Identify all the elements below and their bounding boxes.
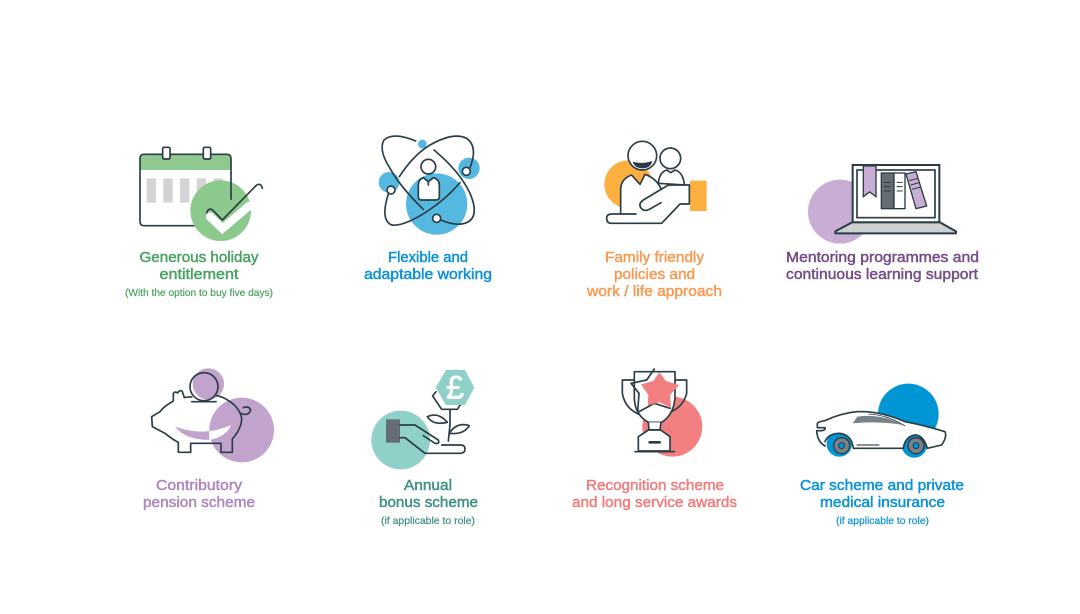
panel: recognition xyxy=(572,369,737,511)
heading line two: medical: medical insurance xyxy=(820,495,945,511)
panel: family friendly xyxy=(586,141,722,300)
heading line two: mentoring: continuous learning support xyxy=(786,267,978,283)
icon: laptop with books xyxy=(808,165,956,244)
heading line two: family: policies and xyxy=(614,267,695,283)
heading: car: Car scheme and private xyxy=(800,478,964,494)
panel: car scheme xyxy=(800,384,964,527)
heading: pension: Contributory xyxy=(156,478,243,494)
heading line two: holiday: entitlement xyxy=(160,267,238,283)
panel: holiday xyxy=(125,147,273,299)
icon: family in hand xyxy=(604,141,707,223)
heading: family: Family friendly xyxy=(605,250,705,266)
panel: bonus xyxy=(371,369,478,527)
icon: hand with plant and pound: £ xyxy=(446,369,464,405)
note: buy five days: (With the option to buy five days) xyxy=(125,287,273,299)
heading line two: flexible: adaptable working xyxy=(364,267,492,283)
panel: flexible working xyxy=(364,136,492,283)
heading line two: bonus: bonus scheme xyxy=(379,495,478,511)
heading: mentoring: Mentoring programmes and xyxy=(786,250,979,266)
icon: hand with plant and pound xyxy=(371,369,474,469)
heading line two: awards: and long service awards xyxy=(572,495,737,511)
note: if applicable: (if applicable to role) xyxy=(836,515,929,527)
heading: holiday: Generous holiday xyxy=(140,250,259,266)
panel: pension xyxy=(143,368,274,511)
heading: recognition: Recognition scheme xyxy=(586,478,724,494)
icon: calendar with check xyxy=(140,147,262,241)
heading: annual: Annual xyxy=(404,478,452,494)
panel: mentoring xyxy=(786,165,979,283)
note: if applicable: (if applicable to role) xyxy=(381,515,475,527)
icon: piggy bank xyxy=(152,368,274,462)
icon: trophy with star xyxy=(622,369,702,457)
icon: atom with person xyxy=(379,136,480,235)
heading line two: pension: pension scheme xyxy=(143,495,255,511)
heading line three: family: work / life approach xyxy=(586,284,722,300)
heading: flexible: Flexible and xyxy=(388,250,468,266)
icon: car xyxy=(817,384,946,458)
